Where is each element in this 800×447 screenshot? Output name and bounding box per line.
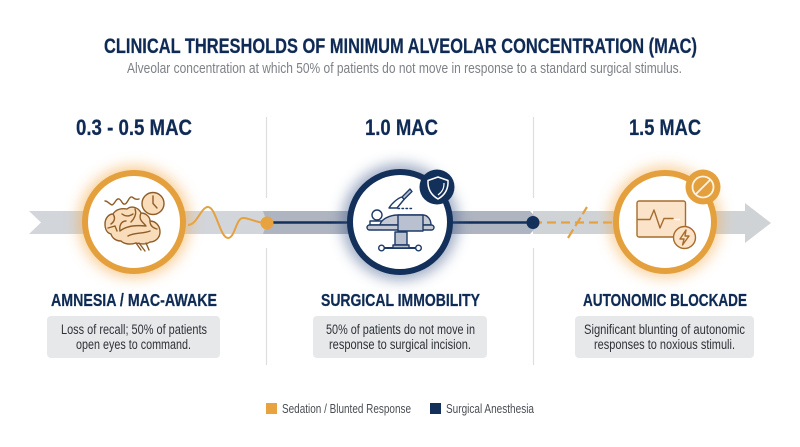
heading: amnesia: AMNESIA / MAC-AWAKE — [51, 290, 217, 310]
icon: monitor with ekg and bolt — [637, 201, 696, 248]
badge: prohibited — [686, 170, 720, 204]
orange dashed line with break — [533, 207, 612, 238]
description box: autonomic blockade — [575, 316, 754, 358]
navy connector line — [267, 221, 533, 224]
threshold label: 0.3 - 0.5 MAC: 0.3 - 0.5 MAC — [76, 115, 192, 140]
icon: brain with clock — [105, 192, 164, 251]
description box: amnesia: open eyes to command. — [76, 337, 191, 352]
heading: surgical immobility: SURGICAL IMMOBILITY — [321, 290, 480, 310]
legend: Surgical Anesthesia — [446, 402, 534, 416]
legend — [266, 402, 534, 416]
description box: autonomic blockade: responses to noxious stimuli. — [594, 337, 735, 352]
marker: orange dot — [260, 216, 274, 230]
timeline arrow band — [29, 203, 771, 243]
icon: operating table with patient — [367, 189, 434, 251]
description box: autonomic blockade: Significant blunting of autonomic — [584, 322, 745, 337]
description box: surgical immobility: response to surgical incision. — [329, 337, 471, 352]
heading: autonomic blockade: AUTONOMIC BLOCKADE — [583, 290, 747, 310]
legend: Sedation / Blunted Response — [282, 402, 411, 416]
marker: navy dot — [526, 216, 540, 229]
subtitle: Alveolar concentration at which 50% of patients do not move in response to a standard surgical stimulus. — [127, 61, 682, 77]
icon circle: brain — [78, 166, 190, 278]
description box: surgical immobility: 50% of patients do not move in — [326, 322, 475, 337]
threshold label: 1.0 MAC: 1.0 MAC — [365, 115, 438, 140]
badge: shield — [420, 170, 454, 204]
description box: amnesia — [47, 316, 220, 358]
dividers — [266, 117, 534, 365]
description box: amnesia: Loss of recall; 50% of patients — [61, 322, 207, 337]
description box: surgical immobility — [313, 316, 487, 358]
icon circle: monitor — [609, 166, 721, 278]
orange wave — [188, 207, 267, 238]
threshold label: 1.5 MAC: 1.5 MAC — [629, 115, 701, 140]
icon circle: surgery — [342, 164, 458, 280]
